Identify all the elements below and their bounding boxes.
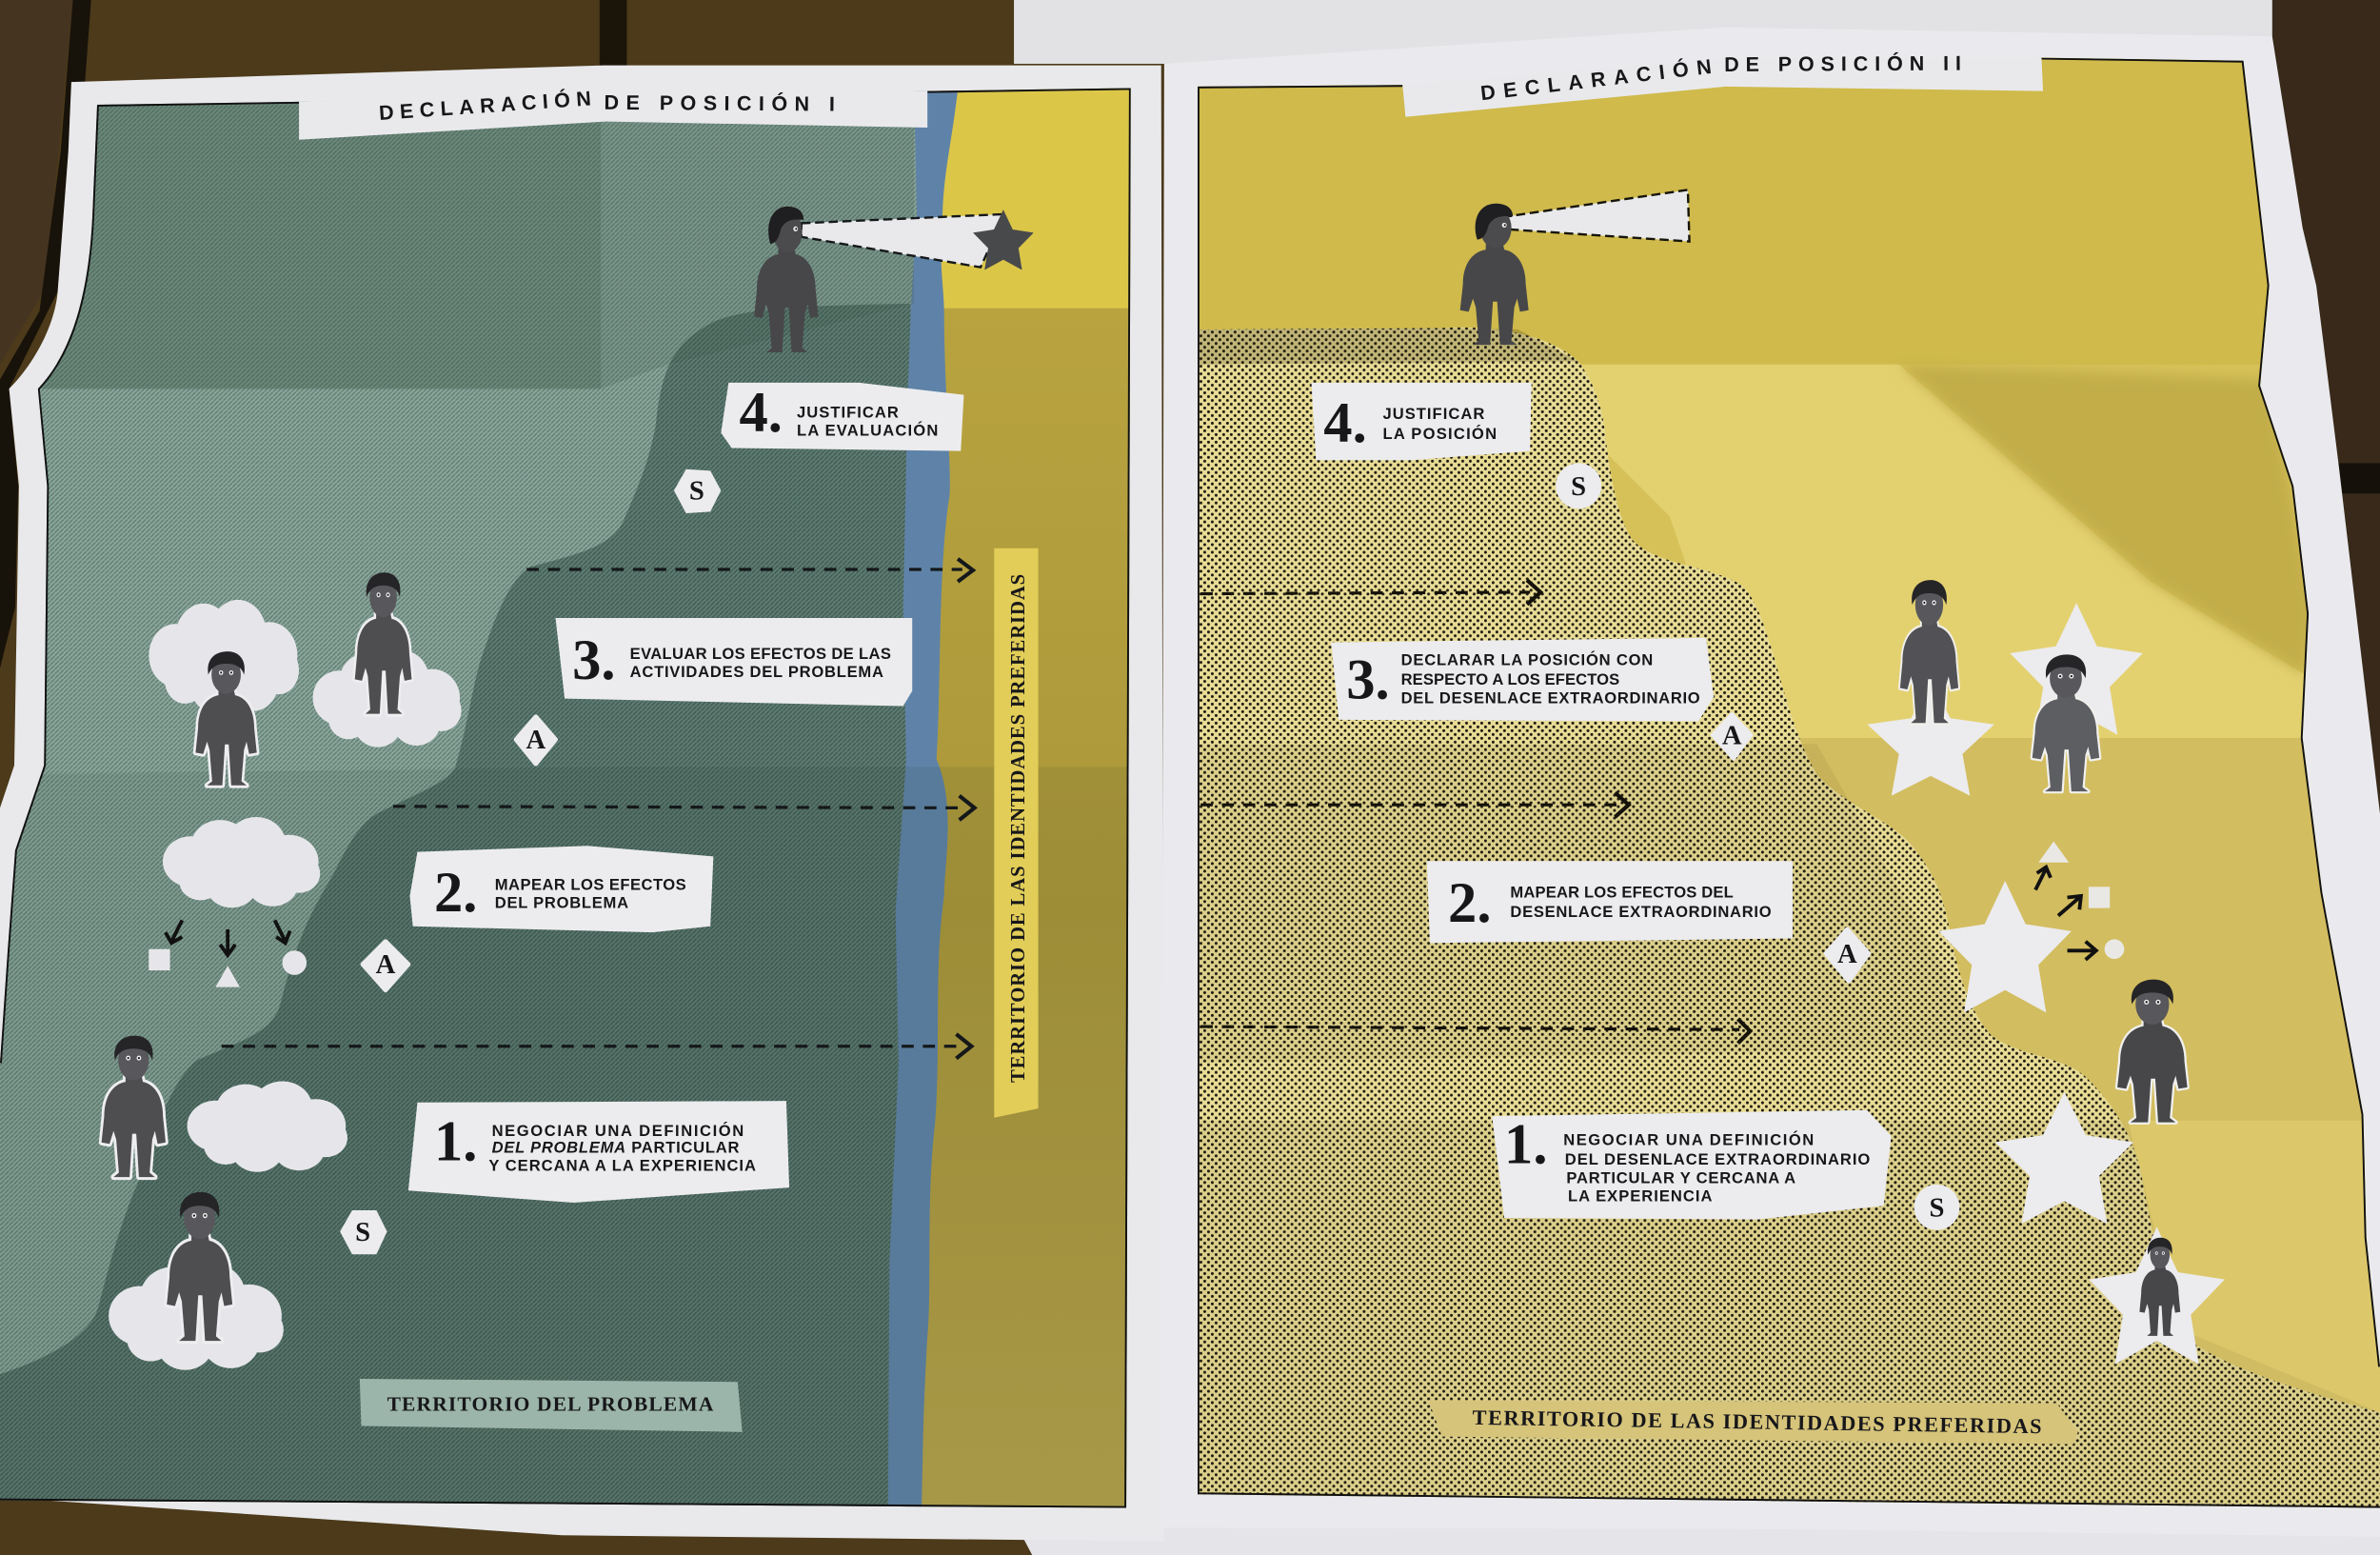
- blue water strip: [888, 76, 960, 1519]
- step 1 label, panel II: PARTICULAR Y CERCANA A: [1566, 1168, 1795, 1186]
- step 1 label, panel I: 1.: [434, 1109, 477, 1173]
- step 3 label, panel I: [556, 618, 912, 707]
- badge S step 4, panel II: S: [1571, 471, 1586, 502]
- badge S step 4, panel II: [1556, 463, 1601, 508]
- dashed arrow II-2: [1200, 792, 1629, 817]
- step 3 label, panel II: RESPECTO A LOS EFECTOS: [1401, 670, 1619, 688]
- step 4 label, panel II: [1312, 383, 1532, 460]
- dashed arrow I-2: [393, 796, 975, 820]
- step 4 label, panel I: 4.: [739, 381, 783, 445]
- bottom label: territory of preferred identities: [1428, 1400, 2078, 1445]
- badge S step 1, panel II: [1914, 1185, 1959, 1230]
- person in front of star: [2010, 603, 2143, 791]
- step 3 label, panel I: 3.: [572, 628, 616, 692]
- dashed arrow II-1: [1200, 1019, 1750, 1044]
- step 1 label, panel I: NEGOCIAR UNA DEFINICIÓN: [492, 1122, 744, 1140]
- lookout figure with beam and star, panel I: [754, 207, 1034, 352]
- badge A step 2: [363, 942, 408, 990]
- step 1 label, panel II: [1492, 1110, 1892, 1220]
- badge A step 3, panel II: A: [1722, 720, 1742, 750]
- step 2 label, panel I: 2.: [434, 861, 477, 925]
- panel I: territory of the problem: [0, 61, 1169, 1534]
- person on bottom cloud: [109, 1192, 284, 1370]
- badge A step 3: A: [526, 725, 545, 755]
- step 4 label, panel I: LA EVALUACIÓN: [797, 422, 938, 440]
- dashed arrow II-3: [1200, 580, 1540, 605]
- step 3 label, panel I: ACTIVIDADES DEL PROBLEMA: [630, 663, 883, 681]
- dotted halftone step path: [1198, 328, 2380, 1519]
- fold shading: [0, 91, 1147, 1519]
- badge S step 1: [340, 1210, 387, 1254]
- badge S step 4: [674, 469, 721, 513]
- frame: [1198, 58, 2380, 1508]
- step 3 label, panel II: [1331, 638, 1714, 721]
- light and shadow on yellow: [1184, 46, 2380, 1519]
- vertical label: territory of preferred identities: TERRITORIO DE LAS IDENTIDADES PREFERIDAS: [1008, 574, 1029, 1083]
- person standing on cloud: [313, 572, 462, 748]
- step 4 label, panel I: JUSTIFICAR: [797, 404, 899, 422]
- badge A step 3, panel II: [1712, 714, 1752, 759]
- effects cloud with arrows and shapes: [149, 817, 320, 987]
- header tab I: [299, 86, 927, 140]
- person with outline, left edge: [102, 1036, 166, 1177]
- badge A step 3: [516, 717, 556, 764]
- person on star: [1867, 580, 1994, 796]
- star radiating effects: [1938, 841, 2124, 1012]
- small person on star: [2089, 1227, 2225, 1365]
- step 4 label, panel II: LA POSICIÓN: [1382, 425, 1497, 443]
- cloud beside person: [188, 1081, 347, 1172]
- header tab I: DECLARACIÓN: [378, 86, 592, 125]
- badge A step 2: A: [376, 949, 396, 980]
- step 1 label, panel II: 1.: [1504, 1113, 1547, 1177]
- step 1 label, panel II: DEL DESENLACE EXTRAORDINARIO: [1565, 1150, 1870, 1168]
- header tab II: DE POSICIÓN II: [1724, 51, 1961, 76]
- step 4 label, panel II: JUSTIFICAR: [1382, 405, 1484, 423]
- poster sheet I: paper: [0, 66, 1164, 1542]
- step 1 label, panel I: DEL PROBLEMA PARTICULAR: [492, 1138, 739, 1156]
- badge S step 1, panel II: S: [1929, 1192, 1944, 1223]
- step 1 label, panel I: [408, 1101, 789, 1203]
- vertical label: territory of preferred identities: [994, 548, 1039, 1118]
- panel II: territory of preferred identities: [1184, 46, 2380, 1534]
- step 1 label, panel II: NEGOCIAR UNA DEFINICIÓN: [1563, 1130, 1814, 1148]
- step 4 label, panel II: 4.: [1323, 391, 1367, 455]
- badge S step 4: S: [689, 476, 704, 507]
- header tab II: [1402, 51, 2043, 117]
- person standing at boundary: [2117, 980, 2188, 1123]
- lookout figure with beam, panel II: [1460, 189, 1690, 345]
- badge S step 1: S: [355, 1217, 370, 1247]
- badge A step 2, panel II: A: [1837, 939, 1857, 969]
- dark green step path: [0, 304, 911, 1519]
- step 2 label, panel II: [1427, 861, 1793, 943]
- step 3 label, panel II: DECLARAR LA POSICIÓN CON: [1401, 650, 1653, 668]
- dashed arrow I-1: [222, 1034, 971, 1059]
- step 3 label, panel II: DEL DESENLACE EXTRAORDINARIO: [1401, 688, 1700, 707]
- step 2 label, panel II: 2.: [1448, 871, 1491, 935]
- frame: [0, 88, 1131, 1508]
- badge A step 2, panel II: [1826, 929, 1869, 981]
- bottom label: territory of the problem: TERRITORIO DEL PROBLEMA: [387, 1392, 714, 1416]
- bottom label: territory of the problem: [360, 1379, 743, 1432]
- step 3 label, panel I: EVALUAR LOS EFECTOS DE LAS: [630, 645, 891, 663]
- header tab II: DECLARACIÓN: [1479, 54, 1713, 105]
- arrows from star to shapes: [2035, 867, 2096, 960]
- bottom label: territory of preferred identities: TERRITORIO DE LAS IDENTIDADES PREFERIDAS: [1472, 1405, 2042, 1438]
- poster sheet II: paper: [1161, 28, 2380, 1537]
- step 3 label, panel II: 3.: [1346, 648, 1390, 712]
- step 2 label, panel I: MAPEAR LOS EFECTOS: [495, 876, 686, 894]
- step 2 label, panel II: MAPEAR LOS EFECTOS DEL: [1510, 883, 1734, 901]
- fold shadows: [1184, 328, 2380, 1519]
- header tab I: DE POSICIÓN I: [605, 90, 835, 116]
- dashed arrow I-3: [526, 559, 973, 582]
- step 1 label, panel I: Y CERCANA A LA EXPERIENCIA: [488, 1157, 756, 1175]
- yellow shore: preferred identities territory: [920, 88, 1131, 1508]
- step 2 label, panel I: [409, 846, 713, 932]
- white star: [1995, 1092, 2133, 1224]
- step 2 label, panel I: DEL PROBLEMA: [495, 894, 628, 912]
- step 4 label, panel I: [721, 381, 963, 451]
- cloud with person top-left: [149, 600, 299, 786]
- step 1 label, panel II: LA EXPERIENCIA: [1568, 1186, 1712, 1205]
- arrows from cloud to shapes: [166, 920, 290, 955]
- step 2 label, panel II: DESENLACE EXTRAORDINARIO: [1510, 903, 1772, 921]
